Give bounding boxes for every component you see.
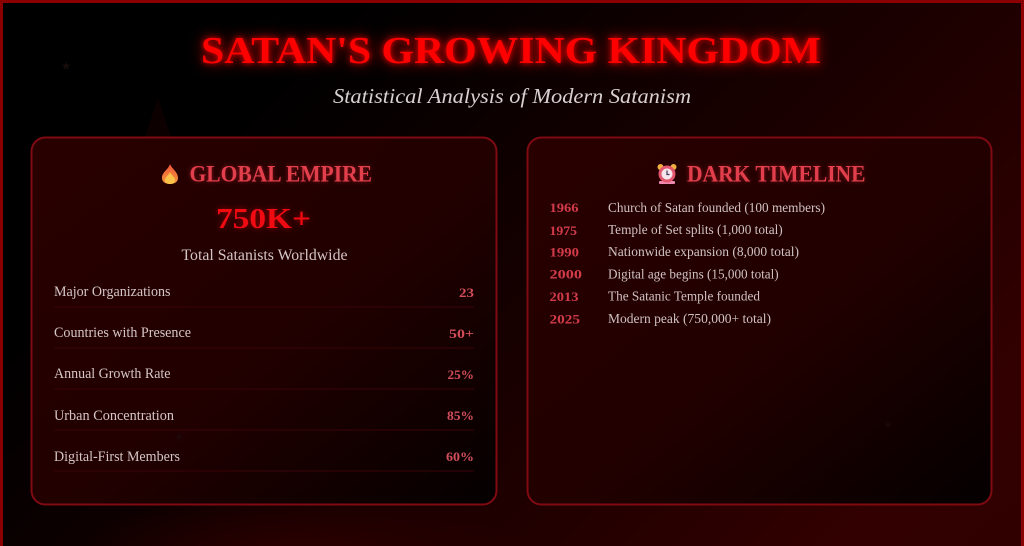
heading: global empire: GLOBAL EMPIRE: [190, 162, 372, 187]
stat row: major organizations: Major Organizations: [54, 284, 171, 300]
timeline row: 1975: Temple of Set splits (1,000 total): [608, 222, 783, 237]
stat row: digital-first members: Digital-First Members: [54, 449, 180, 465]
stat row: urban concentration: Urban Concentration: [54, 408, 175, 424]
timeline row: 2013: [550, 289, 760, 304]
big number: 750K+: [216, 203, 311, 235]
panel: global empire: [32, 138, 496, 504]
icon: alarm clock: [658, 164, 676, 184]
faint star in right panel: ★: [884, 420, 893, 431]
faint star in left panel: ★: [175, 432, 184, 443]
faint background star: ★: [61, 59, 71, 73]
timeline row: 1975: 1975: [550, 224, 577, 238]
timeline row: 1975: [550, 222, 783, 238]
panel: dark timeline: [528, 138, 992, 504]
timeline row: 2000: 2000: [550, 268, 582, 282]
stat row: major organizations: 23: [459, 285, 475, 300]
timeline row: 1990: 1990: [550, 246, 579, 260]
stat row: annual growth rate: [54, 366, 474, 389]
faint background pentagram spike: [96, 98, 220, 222]
title: SATAN'S GROWING KINGDOM: [201, 30, 821, 72]
timeline row: 2013: 2013: [550, 290, 578, 304]
stat row: annual growth rate: 25%: [448, 367, 474, 382]
timeline row: 1990: Nationwide expansion (8,000 total): [608, 244, 799, 259]
timeline row: 2025: 2025: [550, 312, 580, 326]
timeline row: 1966: Church of Satan founded (100 members): [608, 200, 825, 215]
panel background: [528, 138, 992, 504]
stat row: major organizations: [54, 284, 475, 307]
panel background: [32, 138, 496, 504]
big number caption: Total Satanists Worldwide: [182, 247, 348, 264]
icon: flame: [162, 164, 178, 184]
stat row: urban concentration: [54, 408, 474, 430]
timeline row: 2025: Modern peak (750,000+ total): [608, 311, 771, 326]
timeline row: 1966: 1966: [550, 201, 578, 215]
subtitle: Statistical Analysis of Modern Satanism: [333, 84, 691, 108]
timeline row: 2013: The Satanic Temple founded: [608, 289, 760, 304]
stat row: countries with presence: 50+: [449, 326, 474, 341]
stat row: digital-first members: 60%: [446, 449, 474, 464]
stat row: countries with presence: Countries with Presence: [54, 325, 191, 341]
stat row: countries with presence: [54, 325, 474, 348]
stat row: annual growth rate: Annual Growth Rate: [54, 366, 170, 382]
stat row: digital-first members: [54, 449, 474, 471]
stat row: urban concentration: 85%: [447, 408, 474, 423]
heading: dark timeline: DARK TIMELINE: [687, 162, 866, 187]
timeline row: 2000: Digital age begins (15,000 total): [608, 266, 779, 282]
